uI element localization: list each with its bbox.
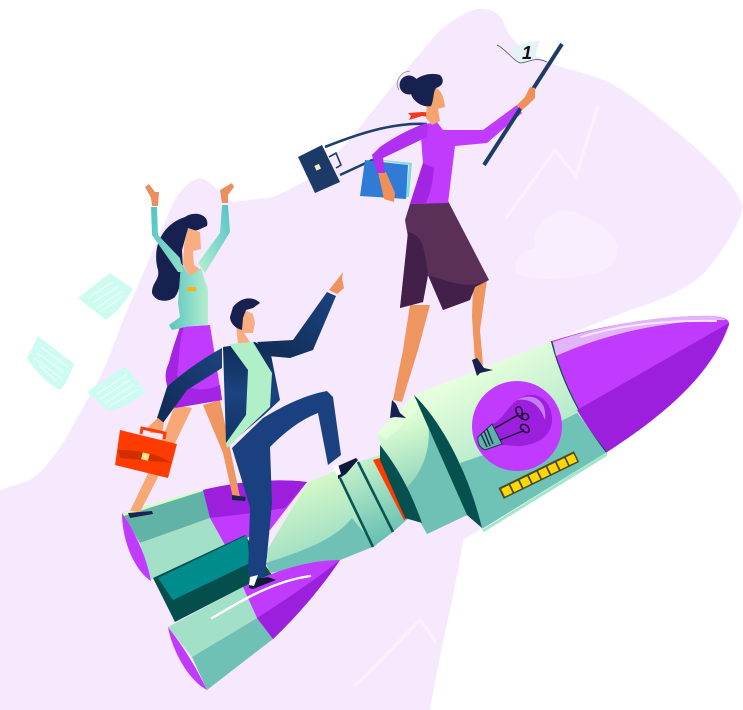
neck and face [183,228,201,276]
nose cone [552,316,729,452]
section two [377,395,467,534]
hair [152,214,207,301]
skirt [400,201,489,310]
jacket [223,342,280,444]
main section [414,341,607,532]
neck and face [426,87,445,125]
shoes [128,495,246,518]
rocket [122,316,729,690]
lower faint chart arrow [355,620,436,686]
right sleeve [198,205,230,273]
face [236,310,255,345]
torso [169,263,208,330]
bulb socket [478,424,502,450]
woman with raised arms [128,183,246,518]
paper sheet left [27,336,74,390]
shoes [249,458,358,589]
white highlight on lower booster [212,576,310,618]
badge [187,287,196,291]
legs [130,405,192,512]
yellow ladder [498,451,579,499]
scarf [408,112,437,120]
flag [497,40,547,63]
folder [360,158,412,199]
faint cloud [515,211,618,279]
lower fin [243,560,340,639]
hands [145,183,234,206]
raised arm [257,292,336,358]
red ring [373,458,410,520]
paper sheet top [78,273,133,320]
decorative chart arrow, faint [506,106,598,218]
engine collar [340,455,410,547]
shirt [226,342,272,448]
flag woman [298,40,562,418]
purple blouse [372,105,522,204]
lowered hand [148,418,164,433]
trousers [232,391,341,578]
front leg [472,280,487,365]
shoes [390,358,493,418]
hair [397,71,443,106]
filament [495,407,529,440]
back hand [378,172,395,202]
hair [230,298,260,330]
upper fin [203,480,307,545]
bag straps [325,124,427,175]
flag number: 1 [522,43,532,63]
pointing hand [329,272,344,294]
lower booster [168,587,273,690]
rear body [266,470,377,573]
light bulb badge [472,381,562,471]
man in suit [115,272,358,589]
dark centre nozzle [153,535,272,622]
bulb glass [492,395,552,446]
rear leg [393,305,430,402]
left sleeve [151,207,183,272]
paper sheet lower [87,366,146,411]
flag pole [484,44,562,165]
lowered arm [157,348,222,423]
purple skirt [166,325,222,408]
raised hand [517,87,535,110]
red briefcase [115,428,177,478]
upper booster [122,489,225,581]
briefcase [298,145,341,193]
